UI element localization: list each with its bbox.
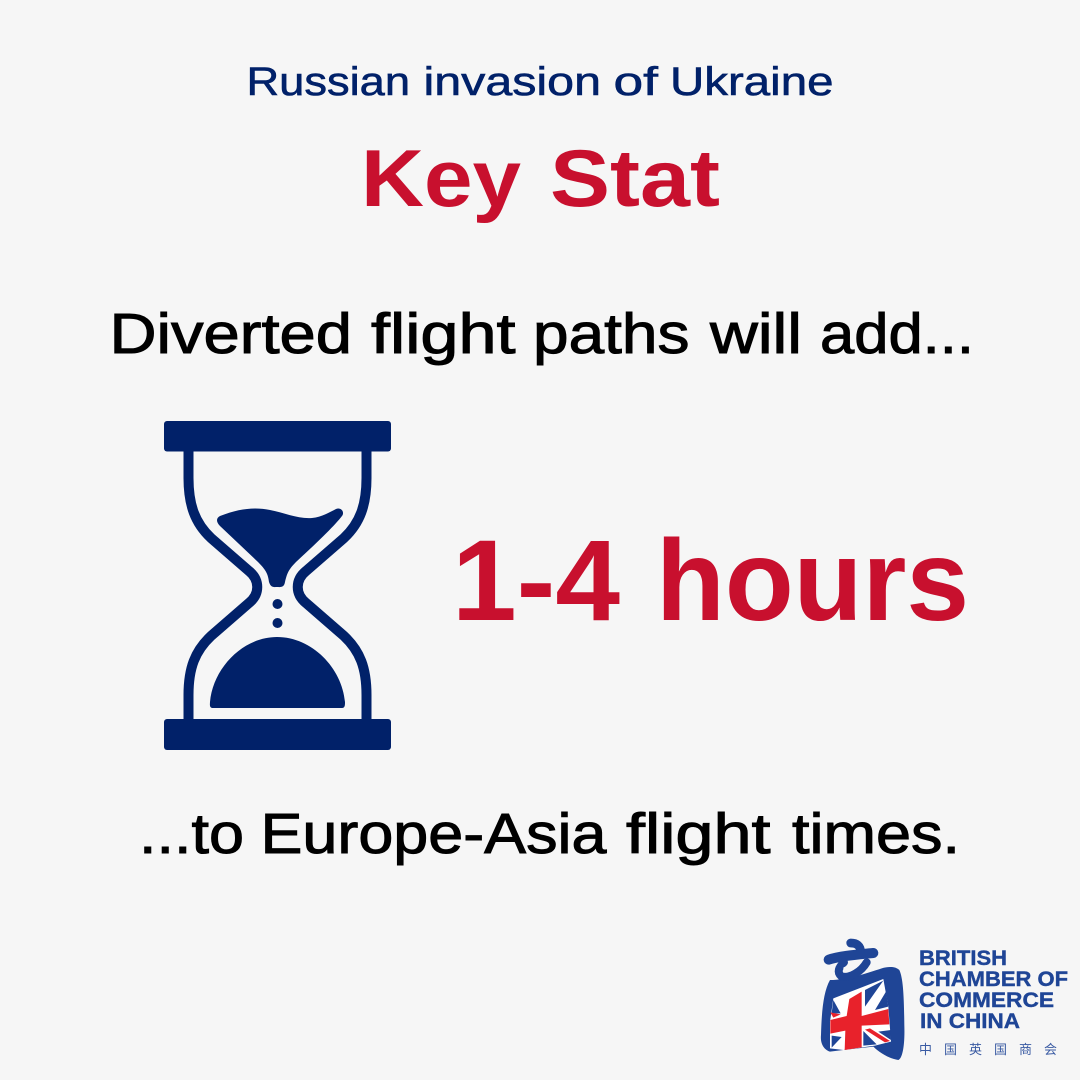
subtitle: Russian invasion of Ukraine: of bbox=[614, 60, 659, 104]
stat: 1-4 hours: hours bbox=[656, 517, 969, 645]
subtitle: Russian invasion of Ukraine: Ukraine bbox=[670, 60, 834, 104]
logo Chinese name: 中国英国商会 bbox=[919, 1042, 1069, 1057]
text: Diverted flight paths will add bbox=[110, 302, 974, 366]
title: Key Stat: Key bbox=[361, 134, 521, 224]
text: to Europe-Asia flight times bbox=[139, 802, 960, 866]
subtitle: Russian invasion of Ukraine bbox=[246, 60, 834, 104]
text: to Europe-Asia flight times: times. bbox=[792, 802, 960, 866]
text: Diverted flight paths will add: paths bbox=[533, 302, 690, 366]
text: to Europe-Asia flight times: flight bbox=[626, 802, 771, 866]
text: Diverted flight paths will add: will bbox=[709, 302, 802, 366]
text: to Europe-Asia flight times: ...to bbox=[139, 802, 244, 866]
logo text: IN CHINA bbox=[920, 1010, 1020, 1033]
title: Key Stat: Stat bbox=[550, 134, 720, 224]
subtitle: Russian invasion of Ukraine: Russian bbox=[246, 60, 410, 104]
stat: 1-4 hours bbox=[452, 517, 969, 645]
text: Diverted flight paths will add: add... bbox=[820, 302, 974, 366]
icon: hourglass bbox=[164, 421, 391, 750]
text: Diverted flight paths will add: Diverted bbox=[110, 302, 352, 366]
logo text: BRITISH bbox=[919, 947, 1007, 970]
text: Diverted flight paths will add: flight bbox=[371, 302, 516, 366]
title: Key Stat bbox=[361, 134, 720, 224]
logo: British Chamber of Commerce in China bbox=[821, 943, 1069, 1060]
logo text: CHAMBER OF bbox=[919, 968, 1068, 991]
logo icon: character with union flag bbox=[821, 943, 904, 1060]
text: to Europe-Asia flight times: Europe-Asia bbox=[260, 802, 607, 866]
logo text: COMMERCE bbox=[919, 989, 1054, 1012]
logo text bbox=[919, 947, 1068, 1033]
stat: 1-4 hours: 1-4 bbox=[452, 517, 620, 645]
subtitle: Russian invasion of Ukraine: invasion bbox=[424, 60, 601, 104]
